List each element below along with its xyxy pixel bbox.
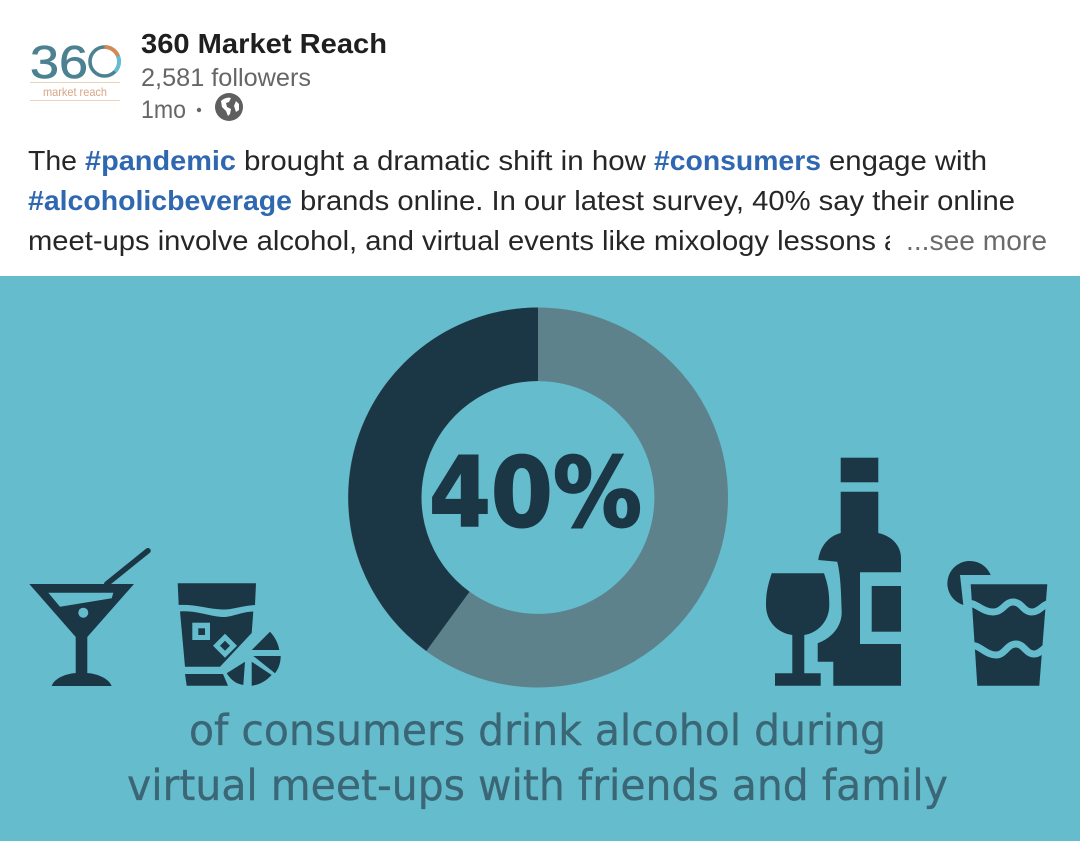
post text: brought a dramatic shift in how	[244, 145, 646, 176]
icon: wine bottle and glass	[766, 458, 901, 686]
separator dot	[197, 108, 201, 112]
icon: glass with lemon slice	[947, 561, 1052, 686]
icon: tumbler with ice and citrus	[178, 583, 281, 686]
post text: #pandemic	[85, 145, 236, 176]
company name: 360 Market Reach	[141, 28, 387, 59]
post text: meet-ups involve alcohol, and virtual events like mixology lessons	[28, 225, 876, 256]
donut value: 40%	[429, 437, 642, 549]
caption: of consumers drink alcohol during	[189, 706, 886, 756]
post header	[30, 28, 387, 124]
panel: infographic background	[0, 276, 1080, 841]
icon: 360 market reach logo: market reach	[43, 85, 107, 99]
post text: The	[28, 145, 77, 176]
post text	[28, 145, 1080, 260]
post text: engage with	[829, 145, 987, 176]
icon: globe	[215, 93, 243, 121]
post text: a	[884, 225, 900, 256]
followers count: 2,581 followers	[141, 64, 311, 92]
caption	[127, 706, 948, 811]
post text: brands online. In our latest survey, 40% say their online	[300, 185, 1015, 216]
post text: ...see more	[906, 225, 1047, 256]
icon: 360 market reach logo	[30, 36, 120, 101]
post text: #alcoholicbeverage	[28, 185, 292, 216]
caption: virtual meet-ups with friends and family	[127, 761, 948, 811]
post text: #consumers	[654, 145, 821, 176]
icon: 360 market reach logo: 36	[30, 36, 88, 88]
post age: 1mo	[141, 96, 186, 124]
donut chart: 40 percent	[348, 308, 691, 651]
icon: martini glass	[29, 551, 148, 686]
